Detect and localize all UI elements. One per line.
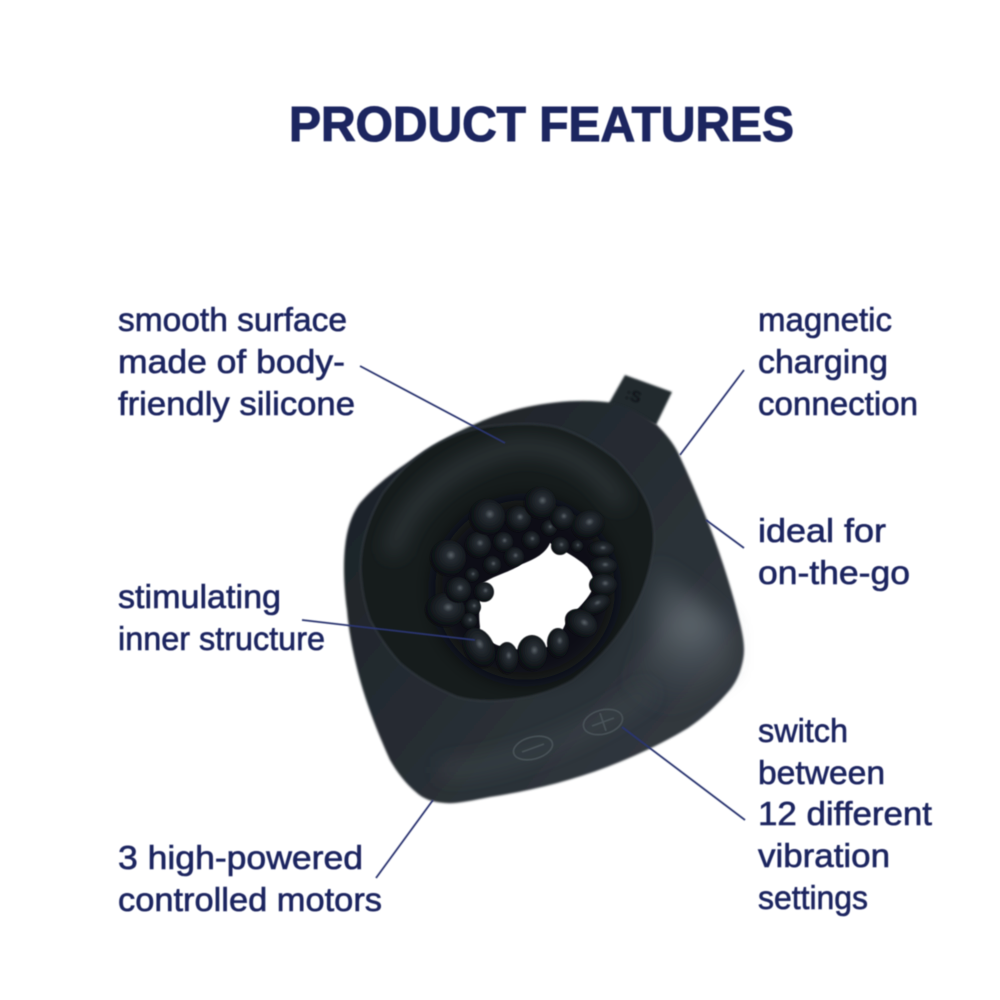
label: magnetic charging <box>758 301 918 422</box>
centre opening <box>479 543 594 650</box>
label: on-the-go: ideal for <box>758 512 886 549</box>
label: motors: controlled motors <box>118 881 382 918</box>
label: smooth surface: made of body- <box>118 343 345 380</box>
leader lines <box>302 366 745 878</box>
cup centre shadow <box>435 500 615 680</box>
charging tab <box>608 375 672 425</box>
line: motors <box>376 800 433 878</box>
label: magnetic charging: connection <box>758 385 918 422</box>
label: vibration settings <box>758 712 932 916</box>
label: motors <box>118 839 382 918</box>
body sheen <box>610 560 732 735</box>
label: vibration settings: settings <box>758 879 868 916</box>
product illustration: vibrating ring <box>344 375 744 803</box>
label: smooth surface: friendly silicone <box>118 385 355 422</box>
label: magnetic charging: magnetic <box>758 301 892 338</box>
label: inner structure <box>118 578 325 657</box>
label: inner structure: stimulating <box>118 578 281 615</box>
cup inner ring highlight <box>392 447 622 555</box>
label: magnetic charging: charging <box>758 343 888 380</box>
label: vibration settings: switch <box>758 712 848 749</box>
label: smooth surface <box>118 301 355 422</box>
label: inner structure: inner structure <box>118 620 325 657</box>
label: vibration settings: between <box>758 754 885 791</box>
label: on-the-go: on-the-go <box>758 554 910 591</box>
lower body light band <box>440 690 650 770</box>
line: inner structure <box>302 620 475 640</box>
charging tab: :S <box>623 386 644 407</box>
label: vibration settings: vibration <box>758 837 890 874</box>
title: PRODUCT FEATURES <box>289 98 794 152</box>
line: vibration settings <box>622 727 745 820</box>
dark cup <box>360 424 654 701</box>
label: on-the-go <box>758 512 910 591</box>
line: on-the-go <box>706 520 744 548</box>
label: motors: 3 high-powered <box>118 839 363 876</box>
line: silicone surface <box>360 366 505 443</box>
button: minus <box>511 732 555 764</box>
device body <box>344 401 744 803</box>
label: smooth surface: smooth surface <box>118 301 347 338</box>
label: vibration settings: 12 different <box>758 795 932 832</box>
inner structure beads <box>425 487 617 674</box>
line: charging <box>680 370 744 455</box>
button: plus <box>581 705 625 739</box>
